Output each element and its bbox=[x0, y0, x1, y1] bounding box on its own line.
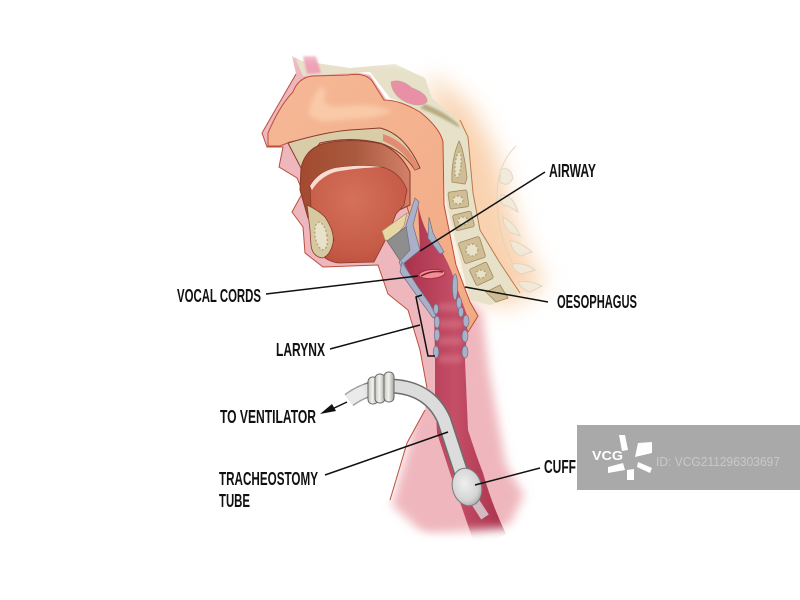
label: tracheostomy tube: TUBE bbox=[219, 491, 250, 511]
glottis bbox=[421, 272, 443, 276]
label: to ventilator: TO VENTILATOR bbox=[220, 407, 316, 427]
neck skin pink bbox=[385, 280, 524, 546]
skull base beige bbox=[296, 60, 518, 305]
collar rings bbox=[368, 372, 394, 404]
label: vocal cords bbox=[177, 276, 418, 306]
label: oesophagus bbox=[465, 287, 637, 312]
bottom fade bbox=[380, 526, 530, 580]
tube left fade bbox=[342, 380, 368, 412]
anatomy illustration bbox=[262, 30, 545, 580]
lower jaw bone bbox=[307, 205, 333, 258]
watermark logo star bbox=[608, 435, 652, 480]
tube continuation below cuff bbox=[472, 497, 485, 517]
front skin outline bbox=[262, 74, 427, 500]
label: airway: AIRWAY bbox=[549, 161, 596, 181]
thyrohyoid muscle bbox=[387, 226, 414, 262]
tube shaft outline bbox=[349, 386, 461, 472]
back of neck peach glow bbox=[425, 72, 545, 305]
label: vocal cords: VOCAL CORDS bbox=[177, 286, 261, 306]
cuff balloon bbox=[448, 465, 486, 509]
label: tracheostomy tube: TRACHEOSTOMY bbox=[219, 469, 318, 489]
skull top fade bbox=[280, 30, 440, 66]
vertebrae bbox=[448, 141, 508, 302]
tongue highlight bbox=[310, 166, 382, 190]
tracheostomy tube bbox=[342, 372, 486, 517]
frontal sinus pink bbox=[303, 56, 321, 74]
oral cavity dark bbox=[300, 140, 410, 218]
nasal turbinate highlight bbox=[308, 86, 393, 122]
hard palate beige bbox=[288, 128, 420, 170]
label: airway bbox=[420, 161, 596, 251]
jaw spongy detail bbox=[313, 221, 329, 251]
sphenoid sinus pink bbox=[391, 81, 427, 105]
nasal cavity and pharynx orange bbox=[268, 74, 478, 332]
tongue bbox=[310, 166, 407, 263]
hyoid bone bbox=[382, 213, 407, 241]
label: tracheostomy tube bbox=[219, 432, 448, 511]
larynx bracket bbox=[416, 295, 435, 356]
watermark VCG text: VCG bbox=[592, 448, 623, 463]
label: larynx bbox=[276, 325, 420, 360]
white cover left of neck edge bbox=[330, 266, 427, 500]
spine outer outline bbox=[460, 120, 520, 293]
soft palate bbox=[383, 134, 419, 170]
label: cuff: CUFF bbox=[544, 457, 576, 477]
airway maroon bbox=[403, 205, 506, 542]
watermark id: ID: VCG211296303697 bbox=[656, 455, 780, 469]
tube shaft fill bbox=[349, 386, 461, 472]
label: oesophagus: OESOPHAGUS bbox=[557, 292, 637, 312]
label: larynx: LARYNX bbox=[276, 340, 325, 360]
skull shadow band bbox=[420, 104, 460, 128]
vocal cords bbox=[419, 268, 445, 280]
watermark panel bbox=[577, 425, 800, 490]
vertebrae spongy detail bbox=[453, 152, 486, 278]
cartilage grey bbox=[399, 198, 469, 358]
label: cuff bbox=[475, 457, 576, 485]
face skin pink bbox=[262, 56, 440, 388]
rear spine ghost bbox=[497, 146, 542, 292]
trachea ring shading bbox=[439, 303, 463, 363]
